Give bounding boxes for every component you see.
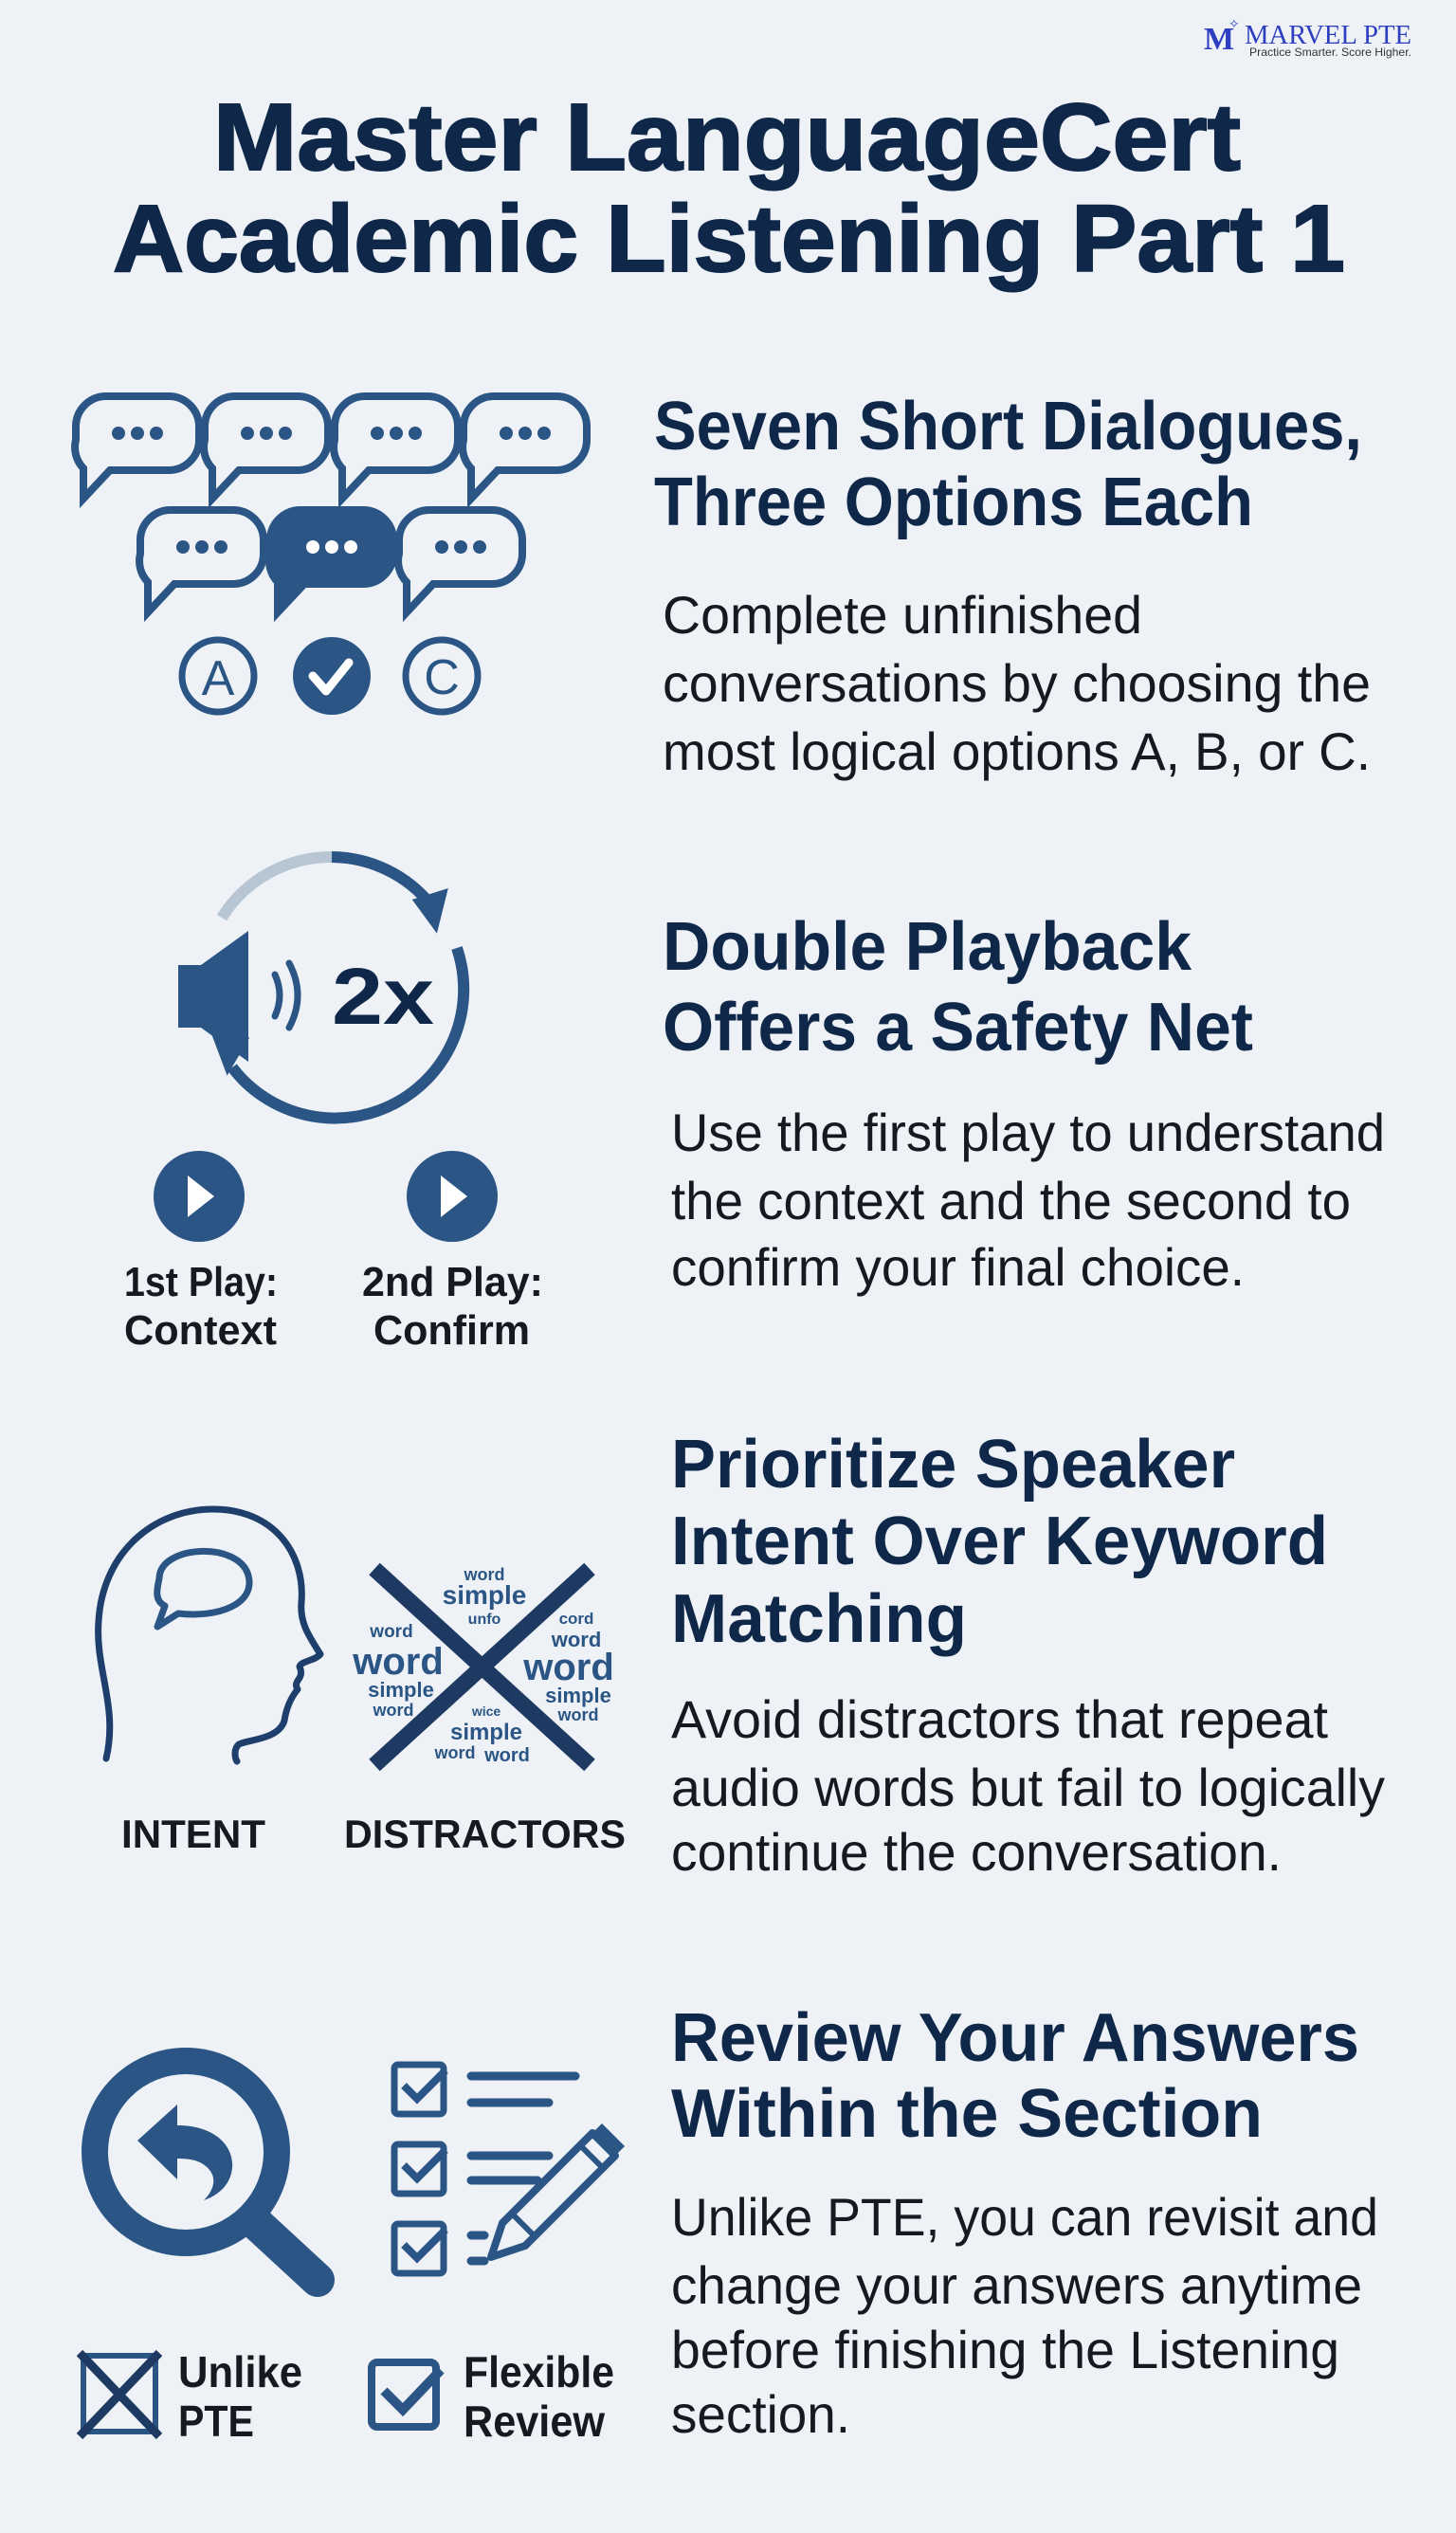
text block: double playback	[671, 1102, 1385, 1297]
label: play steps	[124, 1259, 543, 1354]
text block: review answers: change your answers anytime	[671, 2255, 1362, 2315]
panel: seven dialogues	[75, 389, 1371, 781]
logo: Practice Smarter. Score Higher.	[1249, 46, 1411, 59]
icon: crossed distractor words: word	[352, 1641, 444, 1683]
heading: seven dialogues: Seven Short Dialogues,	[654, 389, 1362, 465]
logo	[1204, 16, 1411, 59]
heading: speaker intent: Intent Over Keyword	[671, 1503, 1328, 1579]
icon: crossed distractor words	[352, 1565, 614, 1766]
icon: crossed distractor words: simple	[443, 1580, 526, 1610]
text block: seven dialogues: Complete unfinished	[663, 585, 1142, 645]
icon: crossed distractor words: word	[434, 1743, 476, 1762]
text block: seven dialogues: most logical options A, B, or C.	[663, 721, 1371, 781]
label: intent and distractors: DISTRACTORS	[344, 1812, 626, 1856]
icon: speaker 2x: 2x	[332, 952, 434, 1041]
icon: replay arcs	[213, 857, 464, 1119]
logo: ✧	[1228, 16, 1240, 31]
label: play steps: 1st Play:	[124, 1259, 278, 1305]
icon: crossed distractor words: word	[483, 1745, 530, 1766]
heading: speaker intent: Prioritize Speaker	[671, 1427, 1235, 1503]
icon: crossed distractor words: word	[463, 1565, 504, 1584]
panel: double playback	[124, 857, 1385, 1354]
text block: review answers	[671, 2187, 1378, 2444]
icon: speech bubbles	[75, 396, 587, 612]
text block: review answers: Unlike PTE, you can revisit and	[671, 2187, 1378, 2247]
icon: crossed distractor words: word	[522, 1647, 614, 1688]
heading: double playback: Double Playback	[663, 909, 1192, 985]
icon: checklist with pencil	[394, 2065, 625, 2273]
label: intent and distractors: INTENT	[121, 1812, 265, 1856]
title	[113, 84, 1345, 292]
label: unlike PTE: Unlike	[178, 2347, 302, 2396]
heading: speaker intent	[671, 1427, 1328, 1657]
icon: crossed distractor words: wice	[471, 1704, 500, 1719]
icon: crossed distractor words: simple	[450, 1720, 522, 1745]
heading: review answers	[671, 2000, 1359, 2152]
text block: seven dialogues: conversations by choosing the	[663, 653, 1371, 713]
heading: review answers: Within the Section	[671, 2076, 1263, 2152]
text block: double playback: the context and the second to	[671, 1171, 1351, 1230]
icon: crossed distractor words: word	[372, 1701, 413, 1720]
icon: crossed distractor words: word	[557, 1705, 599, 1724]
icon: options A check C: C	[424, 650, 460, 705]
logo: MARVEL PTE	[1245, 21, 1411, 50]
icon: crossed distractor words: simple	[368, 1678, 434, 1702]
label: intent and distractors	[121, 1812, 626, 1856]
icon: options A check C	[182, 637, 478, 715]
label: unlike PTE: PTE	[178, 2396, 254, 2446]
icon: crossed distractor words: unfo	[468, 1612, 501, 1628]
text block: double playback: confirm your final choice.	[671, 1237, 1245, 1297]
heading: seven dialogues	[654, 389, 1362, 540]
label: play steps: Context	[124, 1307, 277, 1354]
text block: speaker intent: Avoid distractors that repeat	[671, 1689, 1328, 1749]
panel: speaker intent	[99, 1427, 1385, 1882]
icon: speaker 2x	[178, 931, 434, 1062]
heading: review answers: Review Your Answers	[671, 2000, 1359, 2076]
text block: speaker intent: continue the conversation.	[671, 1822, 1282, 1882]
panel: review answers	[80, 2000, 1378, 2446]
heading: speaker intent: Matching	[671, 1581, 967, 1657]
text block: review answers: section.	[671, 2384, 850, 2444]
title: Academic Listening Part 1	[113, 186, 1345, 292]
icon: crossed distractor words: simple	[545, 1684, 611, 1707]
label: play steps: 2nd Play:	[362, 1259, 543, 1305]
label: flexible review: Review	[464, 2396, 605, 2446]
text block: review answers: before finishing the Listening	[671, 2320, 1339, 2379]
icon: crossed distractor words: word	[551, 1628, 601, 1651]
heading: double playback	[663, 909, 1253, 1066]
icon: head with speech bubble	[99, 1509, 320, 1761]
heading: double playback: Offers a Safety Net	[663, 990, 1253, 1066]
icon: crossed distractor words: cord	[559, 1610, 593, 1628]
label: play steps: Confirm	[373, 1307, 530, 1354]
label: flexible review: Flexible	[464, 2347, 614, 2396]
text block: double playback: Use the first play to understand	[671, 1102, 1385, 1162]
text block: speaker intent	[671, 1689, 1385, 1882]
title: Master LanguageCert	[213, 84, 1241, 191]
text block: seven dialogues	[663, 585, 1371, 781]
text block: speaker intent: audio words but fail to logically	[671, 1758, 1385, 1817]
icon: magnifier with undo arrow	[95, 2061, 318, 2280]
label: unlike PTE	[80, 2347, 302, 2446]
heading: seven dialogues: Three Options Each	[654, 465, 1253, 540]
icon: play buttons	[154, 1151, 498, 1242]
icon: crossed distractor words: word	[369, 1622, 413, 1642]
icon: options A check C: A	[202, 651, 235, 706]
label: flexible review	[372, 2347, 614, 2446]
logo: M	[1204, 22, 1234, 57]
